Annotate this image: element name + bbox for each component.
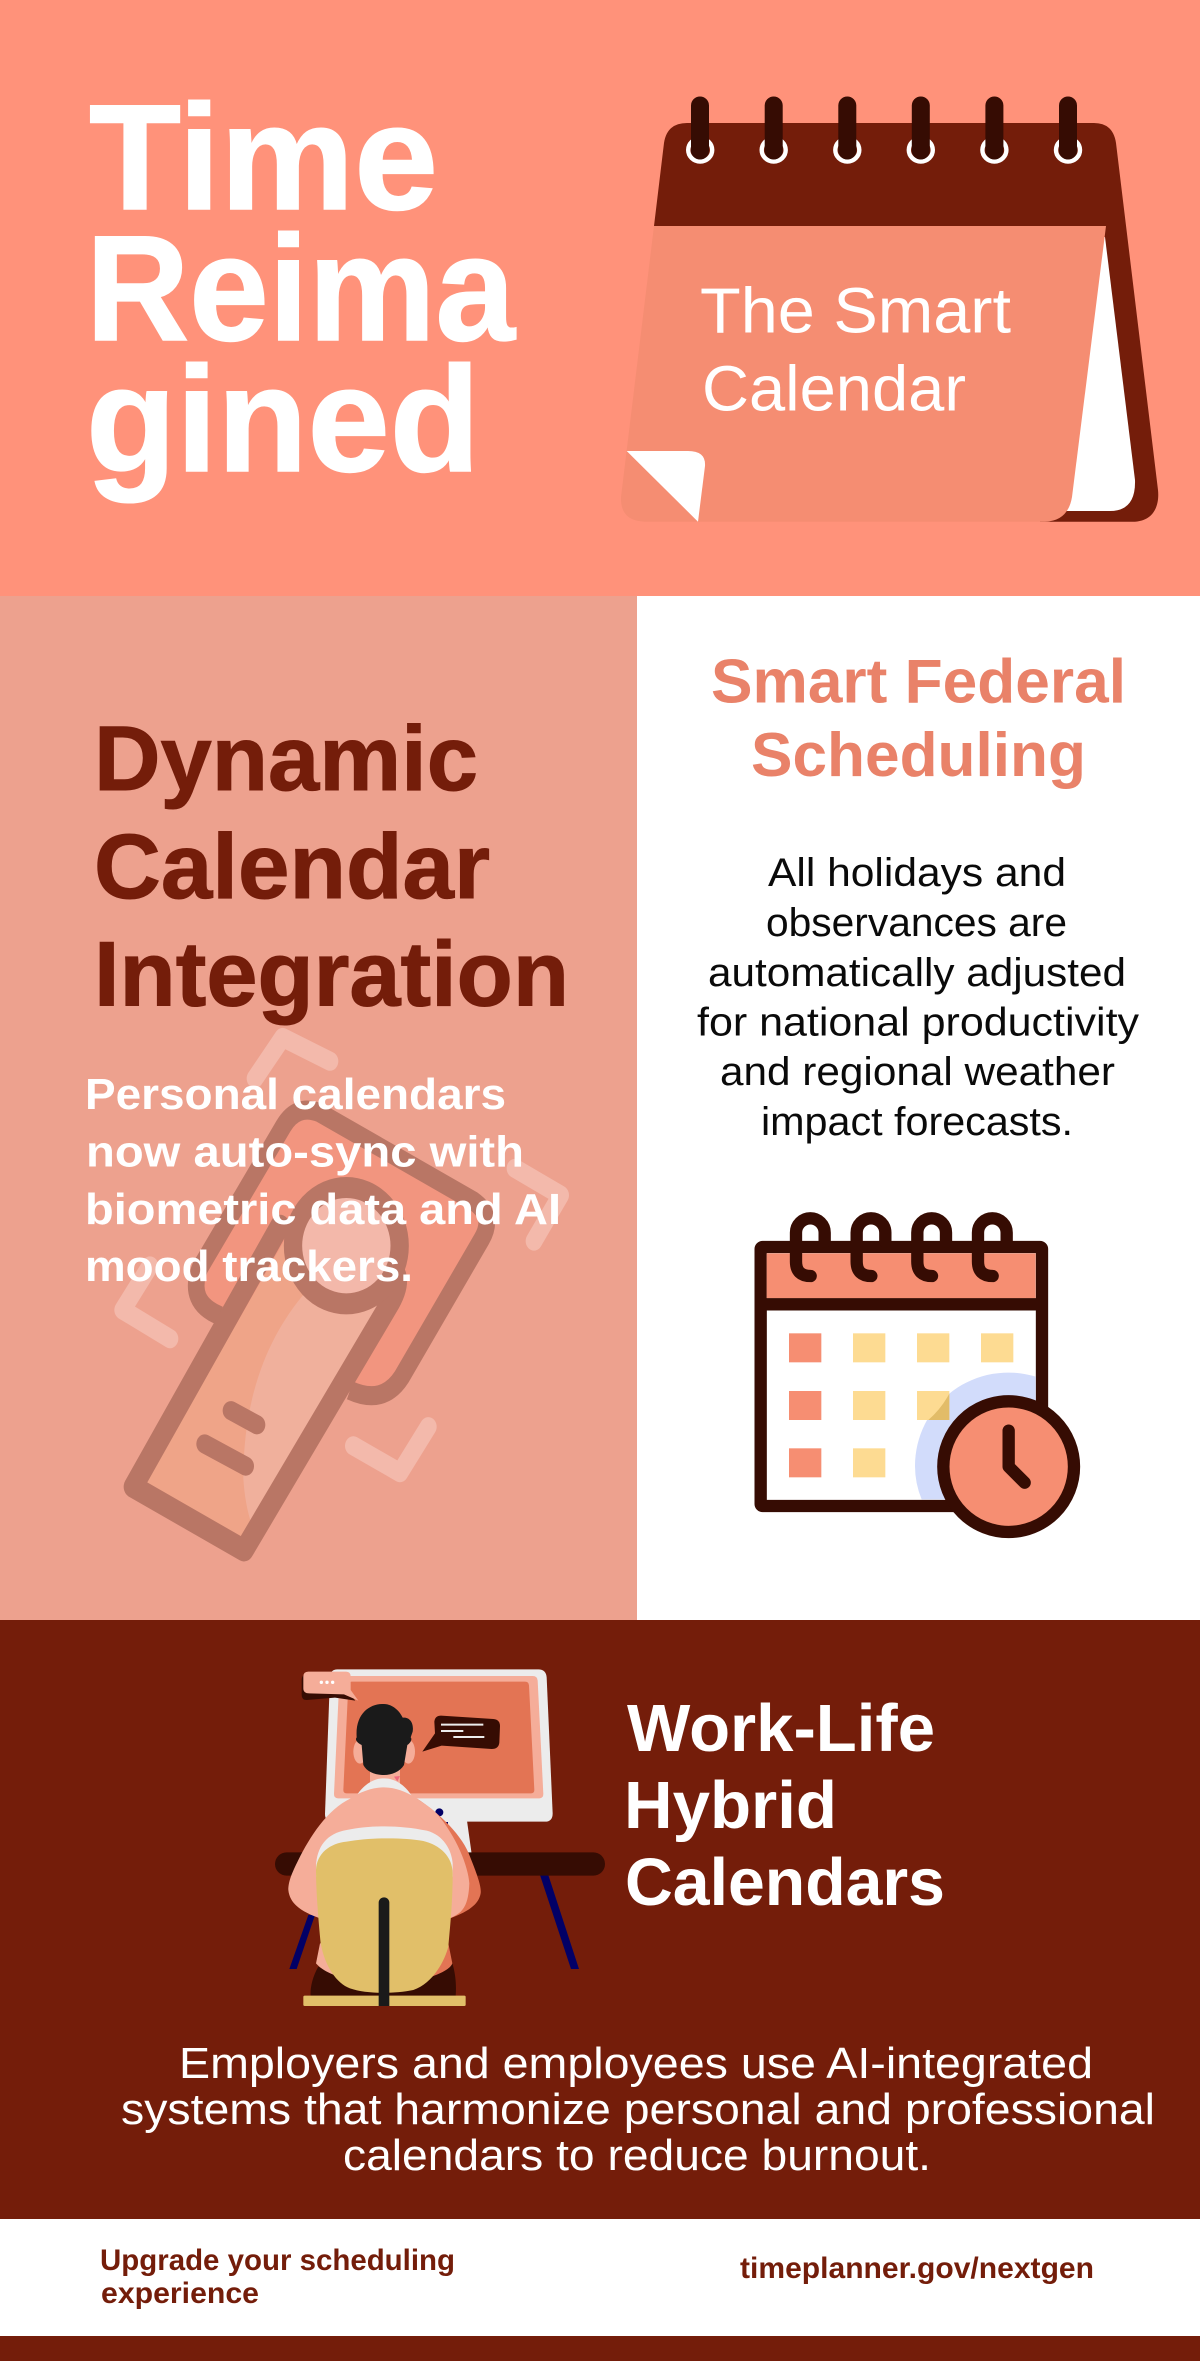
body text: systems that harmonize personal and professional	[121, 2085, 1155, 2134]
heading	[624, 1691, 945, 1920]
body text: Personal calendars	[85, 1070, 506, 1119]
calendar label	[700, 274, 1011, 424]
left speech bubble	[302, 1672, 358, 1701]
body text: mood trackers.	[85, 1242, 413, 1291]
body text: now auto-sync with	[86, 1128, 524, 1176]
call to action: experience	[101, 2277, 259, 2310]
body text: observances are	[766, 901, 1067, 945]
body text	[121, 2039, 1155, 2180]
body text: calendars to reduce burnout.	[343, 2131, 931, 2180]
heading: Smart Federal	[711, 648, 1126, 716]
title	[86, 73, 516, 503]
footer bar	[0, 2336, 1200, 2361]
heading: Calendar	[94, 816, 490, 918]
body text	[85, 1070, 561, 1291]
panel: smart federal scheduling	[637, 596, 1200, 1620]
call to action	[100, 2244, 455, 2310]
body text: All holidays and	[768, 851, 1066, 895]
body text	[697, 851, 1139, 1144]
illustration: person at desk	[275, 1669, 605, 2006]
icon: desk calendar	[621, 96, 1158, 522]
heading: Hybrid	[624, 1768, 837, 1843]
panel: header	[0, 0, 1200, 596]
calendar rings	[688, 96, 1080, 162]
icon: calendar with clock	[761, 1218, 1074, 1532]
body text: impact forecasts.	[761, 1100, 1073, 1144]
heading: Calendars	[625, 1845, 945, 1920]
body text: biometric data and AI	[85, 1185, 561, 1234]
panel: footer	[0, 2219, 1200, 2336]
title: gined	[86, 335, 480, 503]
heading: Scheduling	[751, 721, 1086, 790]
call to action: Upgrade your scheduling	[100, 2244, 455, 2277]
heading: Dynamic	[94, 708, 478, 810]
person	[288, 1704, 481, 1996]
chair base	[303, 1897, 466, 2006]
body text: automatically adjusted	[708, 951, 1126, 995]
panel: dynamic calendar integration	[0, 596, 637, 1620]
calendar label: The Smart	[700, 274, 1011, 346]
heading: Work-Life	[627, 1691, 935, 1766]
body text: and regional weather	[720, 1050, 1115, 1094]
title: Reima	[86, 204, 516, 372]
icon: finger pressing button	[123, 1038, 561, 1550]
calendar label: Calendar	[702, 352, 966, 424]
website url: timeplanner.gov/nextgen	[740, 2252, 1094, 2285]
right speech bubble	[422, 1716, 500, 1752]
title: Time	[89, 73, 438, 241]
heading: Integration	[94, 924, 569, 1026]
heading	[94, 708, 569, 1026]
body text: for national productivity	[697, 1000, 1139, 1044]
heading	[711, 648, 1126, 790]
panel: work-life hybrid calendars	[0, 1620, 1200, 2219]
body text: Employers and employees use AI-integrated	[179, 2039, 1093, 2088]
